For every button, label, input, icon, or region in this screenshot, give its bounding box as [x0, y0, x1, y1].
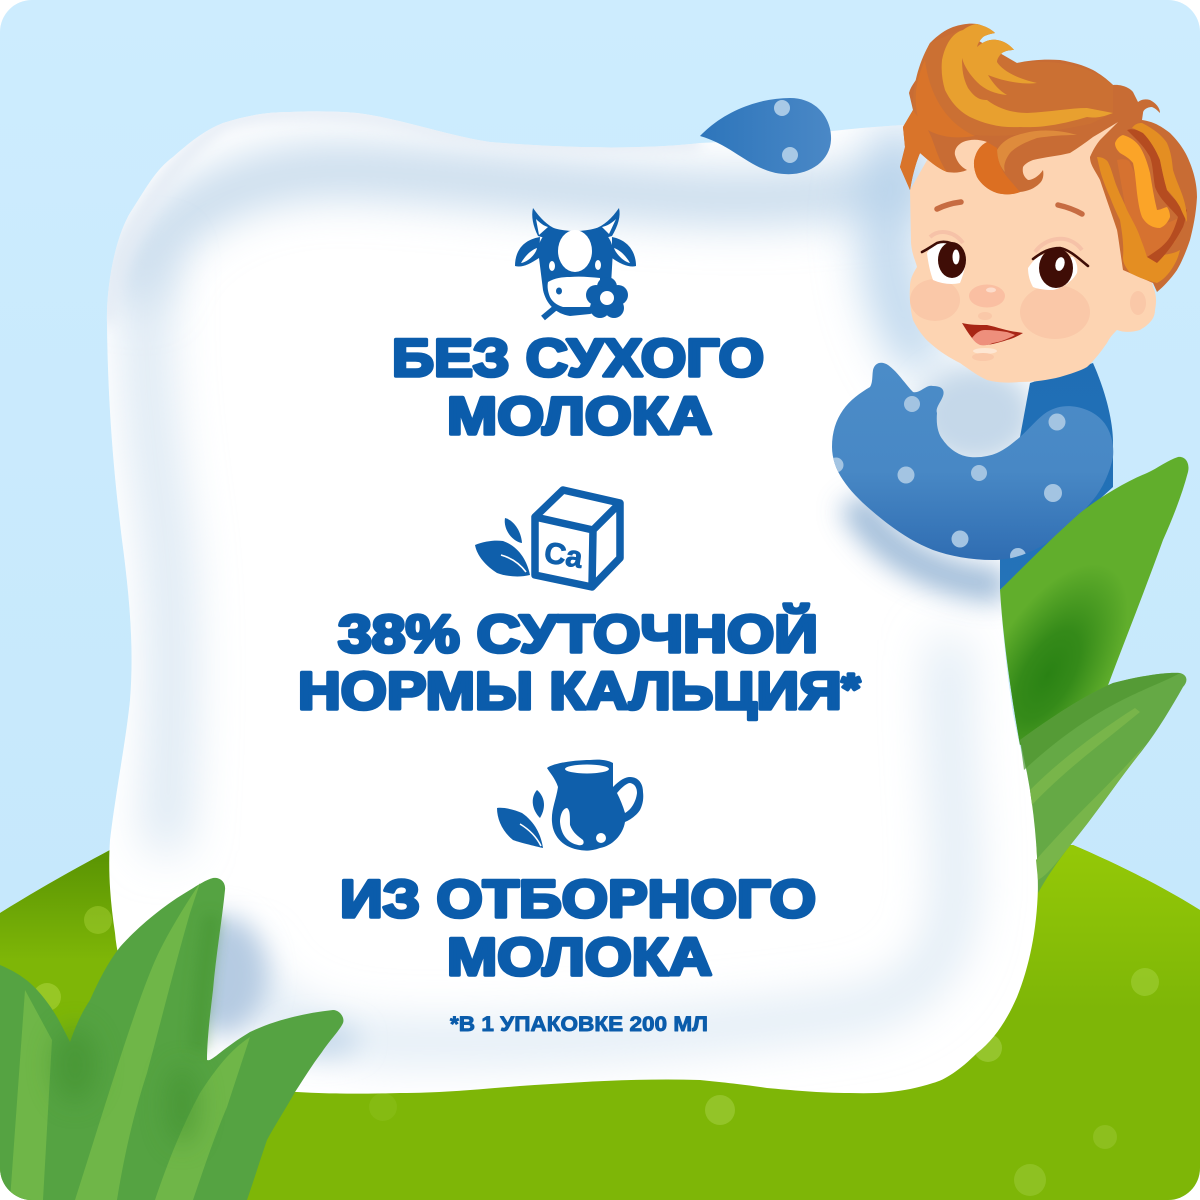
icon: cow	[515, 208, 636, 318]
icon: calcium cube	[535, 490, 620, 587]
hair	[900, 24, 1197, 292]
icon: leaves	[475, 518, 530, 576]
milk panel	[107, 111, 1040, 1094]
heading: 38% СУТОЧНОЙ	[338, 603, 818, 664]
mouth	[962, 323, 1023, 361]
icon: calcium cube: Ca	[542, 536, 585, 575]
icon: leaves	[497, 790, 544, 848]
green hill	[0, 845, 1200, 1200]
baby body	[1000, 363, 1113, 590]
heading second line: МОЛОКА	[447, 928, 712, 987]
left eye	[922, 232, 966, 284]
left grass leaves	[0, 878, 343, 1200]
right hair strands	[1097, 123, 1187, 283]
baby arm	[828, 363, 1113, 564]
lower leaf	[1020, 673, 1186, 893]
heading: БЕЗ СУХОГО	[392, 329, 764, 388]
right eye	[1028, 239, 1088, 290]
benefit 3: selected milk	[340, 760, 816, 987]
heading second line: МОЛОКА	[447, 387, 712, 446]
benefit 2: calcium	[298, 490, 861, 721]
cheeks	[910, 279, 960, 321]
nose	[969, 284, 1005, 320]
face and ear	[910, 120, 1156, 383]
heading second line: *	[842, 665, 861, 712]
icon: milk jug	[547, 760, 643, 851]
footnote: *В 1 УПАКОВКЕ 200 МЛ	[450, 1013, 708, 1036]
baby head	[900, 24, 1197, 383]
heading second line: НОРМЫ КАЛЬЦИЯ	[298, 662, 784, 721]
right grass leaves	[980, 457, 1189, 893]
benefit 1: no milk powder	[392, 208, 764, 446]
upper leaf	[1000, 456, 1188, 745]
milk drop	[700, 98, 831, 174]
heading: ИЗ ОТБОРНОГО	[340, 870, 816, 929]
ear inner	[1130, 291, 1146, 315]
eyebrows	[937, 202, 1082, 214]
